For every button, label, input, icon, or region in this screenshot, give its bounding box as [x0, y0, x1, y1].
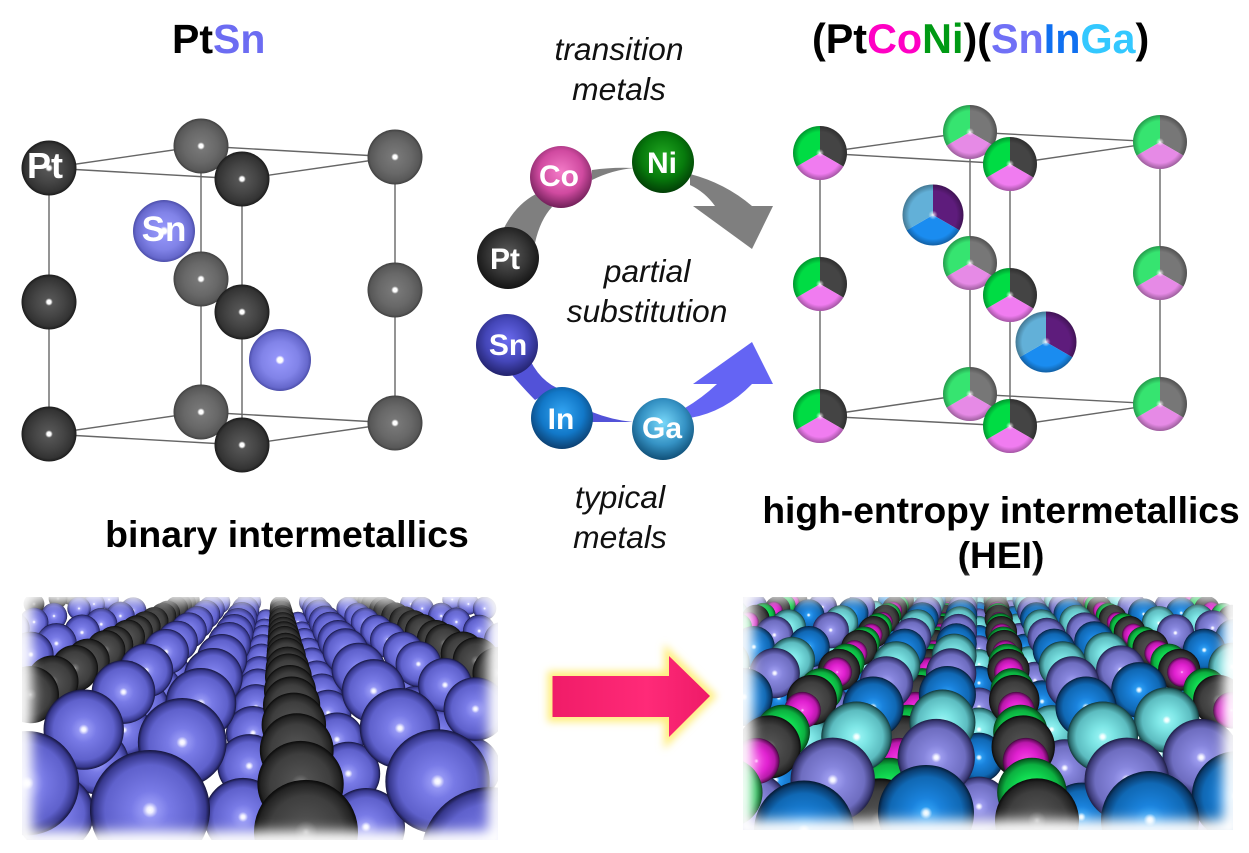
label: partial substitution: substitution — [567, 293, 727, 329]
sphere: Co — [530, 146, 592, 208]
panel: PtSn crystal lattice: Pt — [27, 145, 63, 186]
sphere: In: In — [548, 403, 574, 436]
panel: binary surface model — [22, 597, 498, 840]
title: (PtCoNi)(SnInGa): (PtCoNi)(SnInGa) — [812, 16, 1149, 62]
arrow: transition metals — [503, 168, 773, 249]
sphere: Ga — [632, 398, 694, 460]
label: typical metals: typical — [575, 479, 666, 515]
label: transition metals — [554, 31, 684, 107]
arrow: binary to high-entropy — [552, 656, 710, 737]
panel: high-entropy surface model — [743, 570, 1233, 830]
panel: substitution cycle — [476, 131, 773, 460]
title: PtSn: PtSn — [172, 16, 265, 62]
label: typical metals: metals — [573, 519, 667, 555]
label: partial substitution: partial — [603, 253, 691, 289]
arrow: typical metals — [512, 342, 773, 422]
upper layer rows — [743, 597, 1233, 830]
label: typical metals — [573, 479, 667, 555]
heading: high-entropy intermetallics (HEI): (HEI) — [958, 534, 1044, 576]
label: partial substitution — [567, 253, 727, 329]
sphere: Pt: Pt — [490, 243, 520, 276]
sphere: Ni — [632, 131, 694, 193]
panel: high-entropy crystal lattice — [793, 105, 1187, 453]
lower layer rows — [743, 597, 1207, 830]
label: transition metals: transition — [554, 31, 684, 67]
heading: high-entropy intermetallics (HEI) — [762, 489, 1240, 576]
sphere: Sn: Sn — [489, 329, 527, 362]
sphere: Pt — [477, 227, 539, 289]
panel: PtSn crystal lattice: Sn — [142, 210, 186, 249]
sphere: Sn — [476, 314, 538, 376]
sphere: Co: Co — [539, 160, 579, 193]
heading: high-entropy intermetallics (HEI): high-entropy intermetallics — [762, 489, 1240, 531]
sphere: Ga: Ga — [642, 412, 682, 445]
panel: PtSn crystal lattice — [22, 118, 422, 472]
heading: binary intermetallics: binary intermetallics — [105, 513, 469, 555]
sphere: In — [531, 387, 593, 449]
sphere: Ni: Ni — [647, 147, 677, 180]
label: transition metals: metals — [572, 71, 666, 107]
